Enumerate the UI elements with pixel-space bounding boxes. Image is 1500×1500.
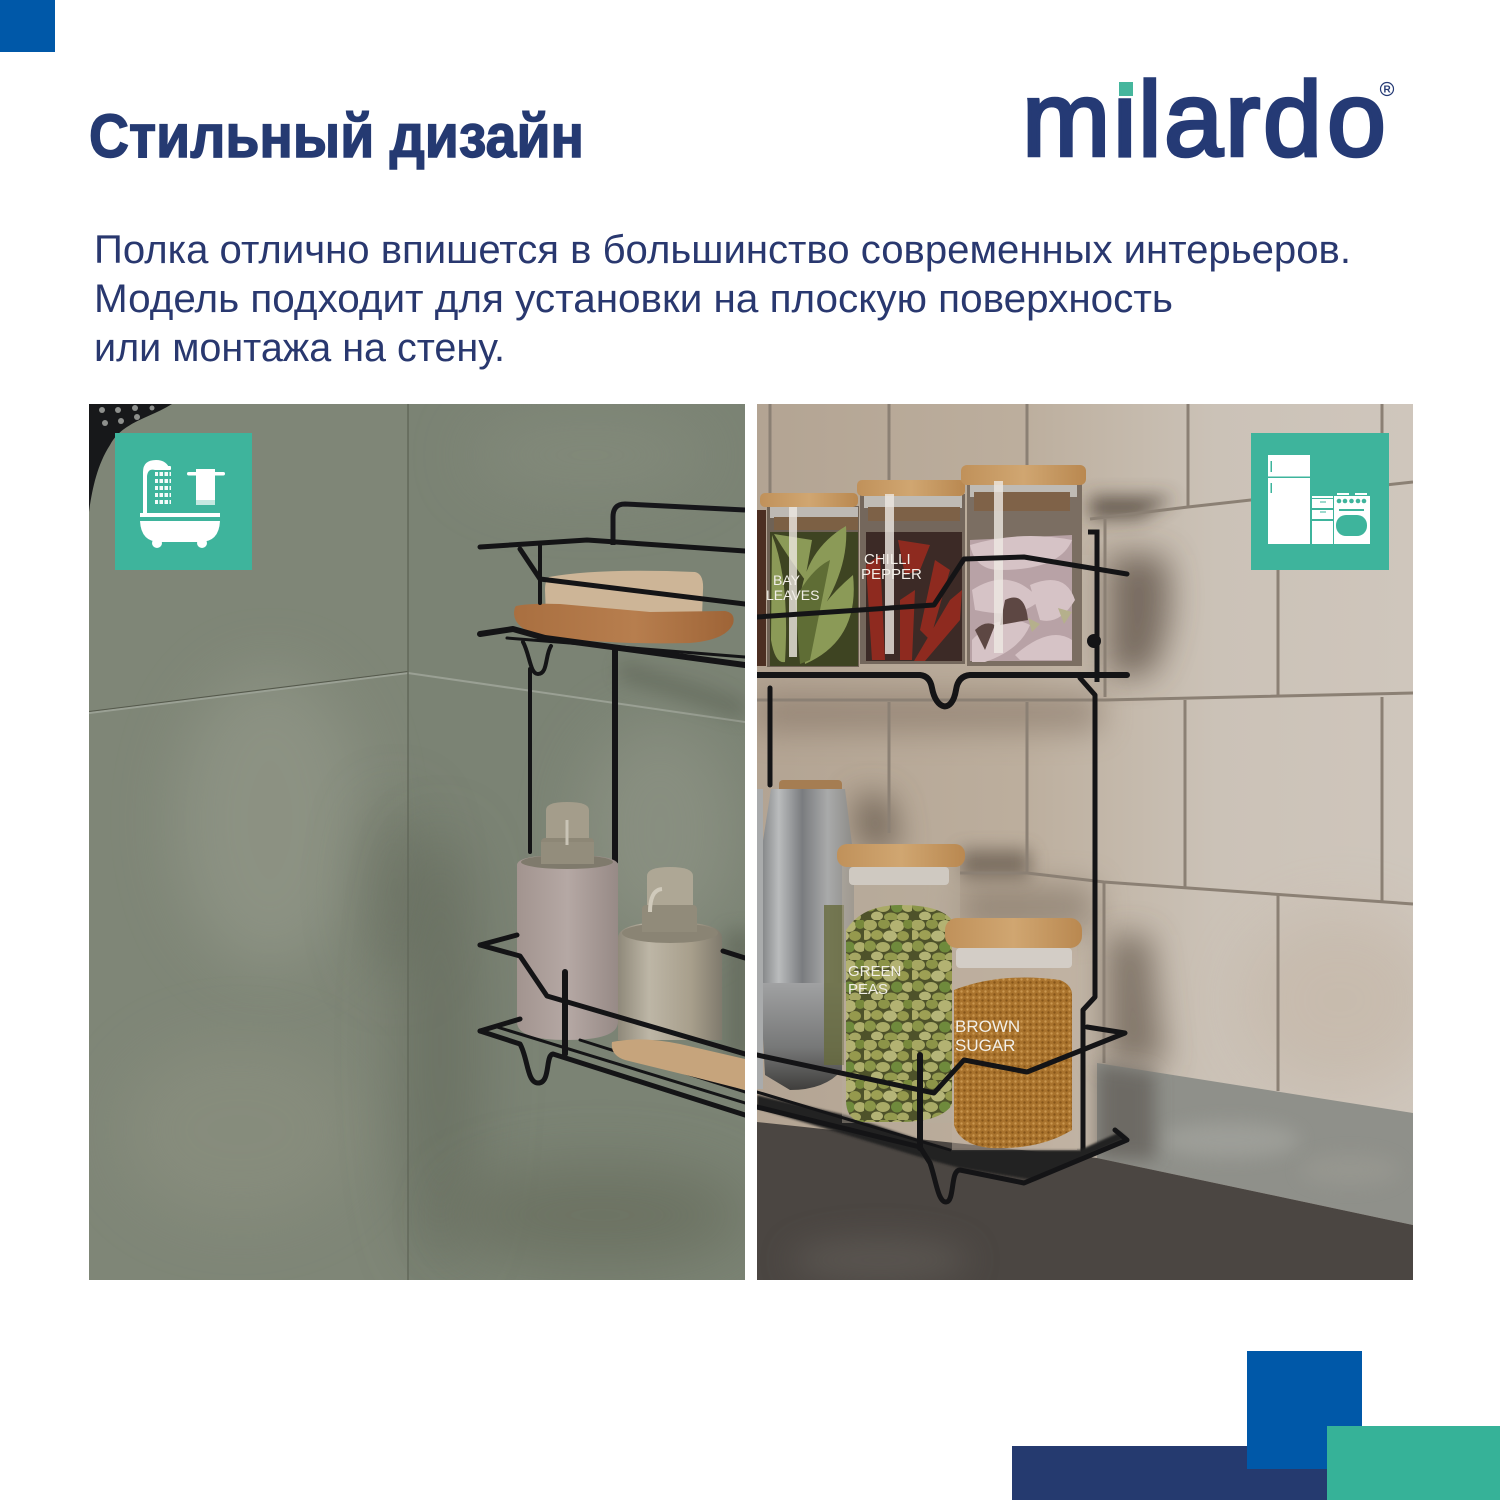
wall knob — [1087, 634, 1101, 648]
concrete backsplash strip — [1097, 1063, 1413, 1225]
wooden soap dish — [514, 604, 734, 643]
shelf shadows on wall — [620, 660, 755, 1060]
lower shelf wires — [757, 1027, 1127, 1202]
logo: milardo: milardo — [1022, 60, 1386, 178]
jar: chilli pepper: CHILLI — [864, 551, 911, 568]
corner blocks: blue square — [1247, 1351, 1362, 1469]
corner accent square — [0, 0, 55, 52]
jar: bay leaves — [760, 493, 859, 667]
jar: pink petals — [961, 465, 1086, 666]
shelf shadow on counter — [757, 1095, 1127, 1180]
jar: brown sugar: SUGAR — [955, 1036, 1015, 1055]
jar: chilli pepper: PEPPER — [861, 566, 922, 583]
intro text block: или монтажа на стену. — [94, 326, 505, 370]
stone countertop — [757, 1122, 1413, 1282]
jar: left edge — [757, 510, 766, 666]
jar: bay leaves: BAY — [773, 572, 801, 588]
silver bottle — [757, 780, 854, 1090]
upper shelf back wires — [613, 504, 745, 545]
corner blocks: navy bar — [1012, 1446, 1332, 1500]
lower shelf wires — [480, 935, 745, 1115]
jar: bay leaves: LEAVES — [766, 587, 819, 603]
soap — [545, 570, 704, 612]
icon: kitchen badge — [1251, 433, 1389, 570]
icon: bathroom badge — [115, 433, 252, 570]
pink soap dispenser — [517, 802, 618, 1040]
jar: green peas: GREEN — [848, 963, 901, 980]
intro text block: Модель подходит для установки на плоскую поверхность — [94, 277, 1173, 321]
intro text block: Полка отлично впишется в большинство современных интерьеров. — [94, 228, 1351, 272]
panel: kitchen photo — [757, 404, 1440, 1282]
jar: brown sugar — [945, 918, 1082, 1150]
logo: milardo: R — [1384, 84, 1392, 96]
jar: brown sugar: BROWN — [955, 1017, 1020, 1036]
jar: green peas: PEAS — [848, 981, 888, 998]
jar: chilli pepper — [857, 480, 965, 664]
green wall — [89, 404, 750, 1280]
steel soap dispenser — [618, 867, 722, 1040]
panel: bathroom photo — [89, 404, 755, 1280]
upper shelf wires — [480, 540, 745, 862]
upper shelf back post — [1088, 532, 1097, 682]
wooden spoon — [612, 1039, 745, 1090]
corner blocks: teal bar — [1327, 1426, 1500, 1500]
title: Стильный дизайн — [89, 102, 584, 170]
upper shelf wires — [757, 557, 1127, 1150]
shower head — [89, 404, 172, 512]
tiled wall — [757, 404, 1440, 1280]
jar: green peas — [837, 844, 965, 1123]
intro text block — [94, 228, 1351, 370]
